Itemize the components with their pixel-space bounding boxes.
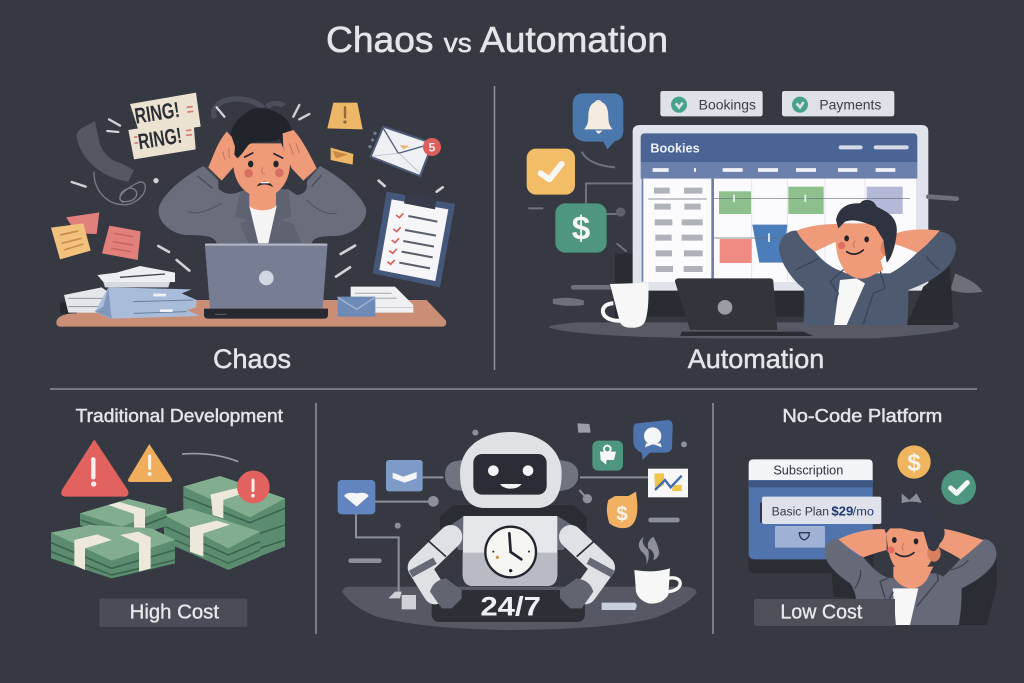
- arms: [419, 537, 451, 593]
- icons and connectors: [338, 420, 688, 592]
- icon: notification bell: [573, 93, 623, 149]
- jacket: [159, 166, 366, 245]
- connector lines: [528, 152, 633, 252]
- subscription window: Basic Plan: [772, 504, 829, 518]
- icons and connectors: $: [616, 503, 628, 526]
- heading: No-Code Platform: [782, 405, 942, 426]
- desk: [56, 300, 446, 327]
- panel: chaos: [51, 93, 455, 327]
- ears: [445, 459, 465, 492]
- icon: amber warning triangle: [128, 444, 172, 482]
- label: Chaos: Chaos: [213, 344, 291, 374]
- head: [460, 432, 562, 508]
- chips: bookings and payments: Payments: [819, 96, 881, 112]
- jacket: [779, 231, 956, 325]
- subscription window: Subscription: [773, 462, 843, 477]
- icon: stress marks: [158, 246, 355, 277]
- icon: check coin: [941, 470, 976, 505]
- high cost label: [99, 599, 247, 627]
- icon: email with badge: 5: [429, 140, 436, 154]
- high cost label: High Cost: [130, 601, 219, 624]
- papers and envelope: [338, 287, 413, 317]
- 24/7 label: 24/7: [480, 592, 541, 622]
- torso: [463, 516, 557, 586]
- heading: Traditional Development: [76, 405, 284, 426]
- hair: [229, 108, 293, 159]
- desk: [342, 587, 697, 630]
- robot: [411, 432, 613, 608]
- laptop: [675, 278, 813, 336]
- icon: ringing telephone: [72, 99, 309, 205]
- icon: red alert badge: [237, 471, 270, 503]
- back right stack: [183, 476, 285, 560]
- title: Chaos vs Automation: [326, 19, 668, 60]
- subscription window: $29: [831, 503, 853, 518]
- person: stressed worker: [159, 108, 366, 245]
- callout: RING RING: [128, 93, 201, 159]
- monitor with booking calendar: [633, 125, 928, 291]
- low cost label: [754, 599, 895, 626]
- icon: dollar coin: [897, 445, 931, 479]
- icon: warning sign: [327, 103, 363, 165]
- hands: [208, 132, 235, 181]
- decorations: [553, 197, 978, 304]
- label: Automation: Automation: [688, 344, 824, 374]
- coffee cup with steam: [634, 537, 680, 604]
- icon: clipboard checklist: [373, 181, 455, 287]
- icon: sticky notes: [51, 212, 141, 260]
- face: [233, 143, 290, 197]
- chips: bookings and payments: Bookings: [699, 96, 756, 112]
- upper left stack: [80, 499, 167, 540]
- panel: no-code platform: [748, 405, 997, 626]
- icon: red warning triangle: [62, 441, 128, 496]
- icon: email with badge: [368, 127, 441, 176]
- subscription window: [748, 459, 881, 573]
- stack of papers: [60, 266, 200, 319]
- desk shadow: [615, 253, 803, 320]
- person: relaxed user: [824, 493, 997, 625]
- icon: check badge: [527, 149, 575, 195]
- icon: dollar coin: $: [907, 450, 921, 477]
- callout: RING RING: RING!: [136, 123, 184, 154]
- clock: [485, 527, 536, 577]
- laptop: [204, 243, 328, 319]
- small box and tablet: [388, 592, 416, 609]
- jacket: [824, 539, 996, 625]
- desk: [548, 322, 959, 338]
- shoulders: [440, 505, 587, 533]
- panel: robot 24/7: [338, 420, 697, 630]
- money stacks: [51, 476, 285, 578]
- panel: traditional development: [51, 405, 285, 627]
- chips: bookings and payments: [660, 91, 894, 116]
- panel: automation: [527, 91, 978, 338]
- callout: RING RING: RING!: [133, 97, 181, 129]
- icon: dollar badge: [555, 203, 625, 253]
- front left stack: [51, 525, 175, 578]
- person: relaxed worker: [779, 200, 956, 325]
- monitor with booking calendar: Bookies: [650, 141, 700, 156]
- coffee cup: [603, 283, 649, 328]
- low cost label: Low Cost: [780, 601, 863, 624]
- chair: [907, 267, 953, 325]
- icon: dollar badge: $: [572, 210, 591, 247]
- 24/7 plate: [432, 590, 585, 622]
- center stack: [164, 508, 260, 570]
- subscription window: /mo: [853, 504, 874, 518]
